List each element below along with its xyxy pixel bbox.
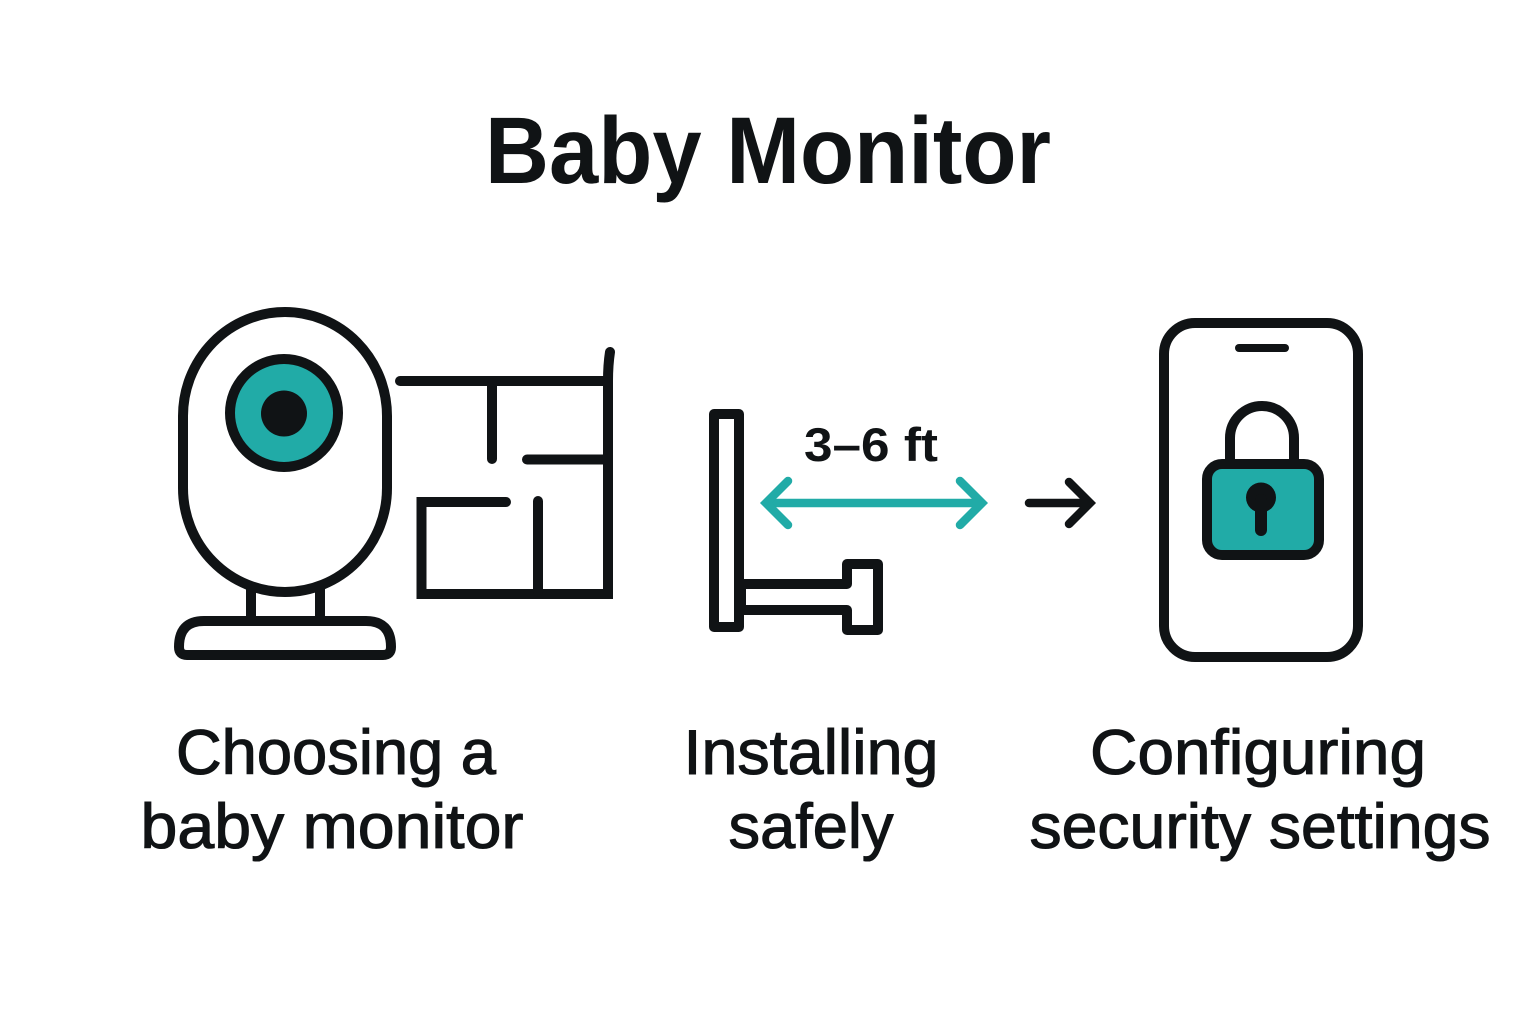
icon: wall mount bbox=[714, 414, 878, 630]
icon: smartphone with lock bbox=[1164, 323, 1358, 657]
step label: configuring security settings bbox=[1030, 718, 1490, 862]
title: Baby Monitor bbox=[485, 98, 1051, 204]
arrow: next step bbox=[1029, 482, 1090, 524]
icon: room floor plan bbox=[400, 352, 610, 594]
arrow: distance double arrow bbox=[766, 481, 982, 525]
distance label: 3–6 ft bbox=[804, 418, 938, 471]
icon: baby monitor camera bbox=[179, 312, 391, 655]
icon: padlock bbox=[1207, 406, 1319, 555]
step label: installing safely: safely bbox=[728, 792, 894, 862]
step label: choosing a baby monitor: Choosing a bbox=[176, 718, 497, 788]
step label: installing safely: Installing bbox=[684, 718, 938, 788]
step label: choosing a baby monitor: baby monitor bbox=[140, 792, 524, 862]
step label: configuring security settings: security settings bbox=[1030, 792, 1490, 862]
step label: configuring security settings: Configuring bbox=[1090, 718, 1426, 788]
step label: choosing a baby monitor bbox=[140, 718, 524, 862]
step label: installing safely bbox=[684, 718, 938, 862]
